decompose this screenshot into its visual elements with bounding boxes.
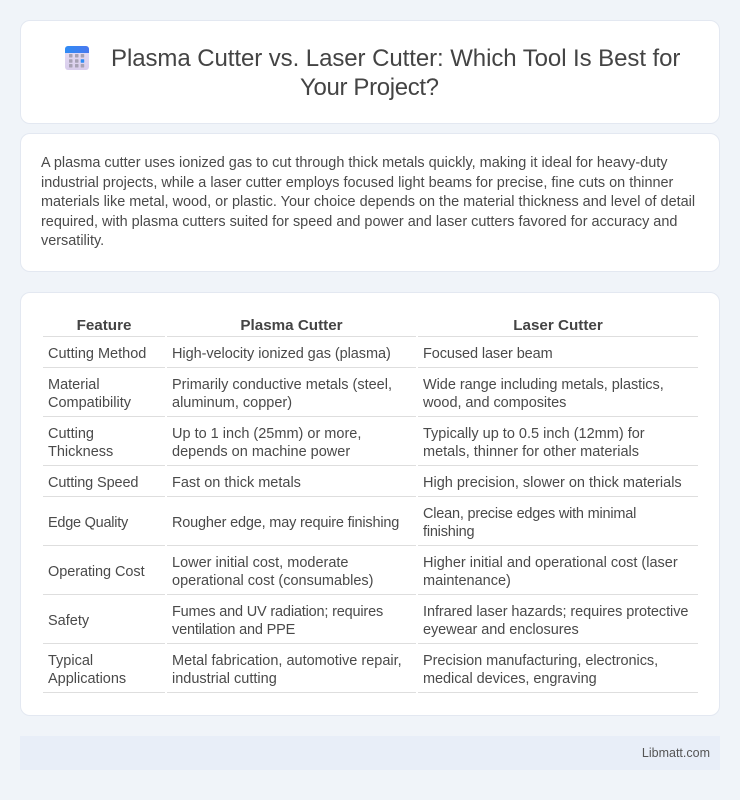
row: typical applications [48,653,658,687]
row: typical applications: Typical [48,653,93,669]
row: material compatibility: wood, and composites [423,395,566,411]
title [111,45,680,101]
row: safety: ventilation and PPE [172,622,295,638]
row: cutting thickness: Thickness [48,444,113,460]
text block: introduction: versatility. [41,233,104,249]
row: cutting method: Focused laser beam [423,346,553,362]
panel: header [20,20,720,124]
row: safety: Safety [48,613,89,629]
table header: Plasma Cutter [240,317,343,334]
row: cutting speed: Fast on thick metals [172,475,301,491]
row: material compatibility: Material [48,377,100,393]
row: operating cost: Higher initial and operational cost (laser [423,555,678,571]
row: safety: Infrared laser hazards; requires protective [423,604,688,620]
row: typical applications: Precision manufacturing, electronics, [423,653,658,669]
row: cutting thickness: Typically up to 0.5 inch (12mm) for [423,426,645,442]
row: material compatibility: aluminum, copper) [172,395,292,411]
row: safety: Fumes and UV radiation; requires [172,604,383,620]
row: safety: eyewear and enclosures [423,622,579,638]
row: operating cost: operational cost (consumables) [172,573,374,589]
text block: introduction: materials like metal, wood, or plastic. Your choice depends on the material thickness and level of detail [41,194,695,210]
footer [20,736,720,770]
row: edge quality: Clean, precise edges with minimal [423,506,636,522]
row: cutting method [48,346,553,362]
text block: introduction: industrial projects, while a laser cutter employs focused light beams for precise, fine cuts on thinner [41,175,673,191]
row: operating cost: Operating Cost [48,564,145,580]
row: material compatibility [48,377,664,411]
text block: introduction: A plasma cutter uses ionized gas to cut through thick metals quickly, making it ideal for heavy-duty [41,155,667,171]
row: material compatibility: Wide range including metals, plastics, [423,377,664,393]
table header: Laser Cutter [513,317,603,334]
icon: calendar grid [65,46,89,70]
title: Your Project? [300,74,439,101]
panel: comparison table [20,292,720,716]
row: typical applications: medical devices, engraving [423,671,597,687]
row: typical applications: industrial cutting [172,671,277,687]
row: cutting thickness: metals, thinner for other materials [423,444,639,460]
row: typical applications: Metal fabrication, automotive repair, [172,653,402,669]
row: cutting thickness: Cutting [48,426,94,442]
text block: introduction: required, with plasma cutters suited for speed and power and laser cutters favored for accuracy and [41,214,677,230]
row: operating cost: Lower initial cost, moderate [172,555,348,571]
panel: introduction [20,133,720,272]
row: edge quality: Rougher edge, may require finishing [172,515,399,531]
text block: introduction [41,155,695,249]
row: operating cost [48,555,678,589]
row: cutting method: Cutting Method [48,346,146,362]
row: cutting thickness: Up to 1 inch (25mm) or more, [172,426,361,442]
row: cutting speed: High precision, slower on thick materials [423,475,682,491]
row: cutting speed: Cutting Speed [48,475,138,491]
row: edge quality: Edge Quality [48,515,128,531]
row: material compatibility: Primarily conductive metals (steel, [172,377,392,393]
row: cutting method: High-velocity ionized gas (plasma) [172,346,391,362]
row: edge quality: finishing [423,524,474,540]
footer credit: Libmatt.com [642,746,710,760]
table header [77,317,603,334]
row: cutting thickness: depends on machine power [172,444,350,460]
row: material compatibility: Compatibility [48,395,131,411]
row: typical applications: Applications [48,671,126,687]
title: Plasma Cutter vs. Laser Cutter: Which Tool Is Best for [111,45,680,72]
table header: Feature [77,317,131,334]
row: edge quality [48,506,636,540]
row: cutting thickness [48,426,645,460]
row: safety [48,604,688,638]
row: operating cost: maintenance) [423,573,511,589]
row: cutting speed [48,475,682,491]
